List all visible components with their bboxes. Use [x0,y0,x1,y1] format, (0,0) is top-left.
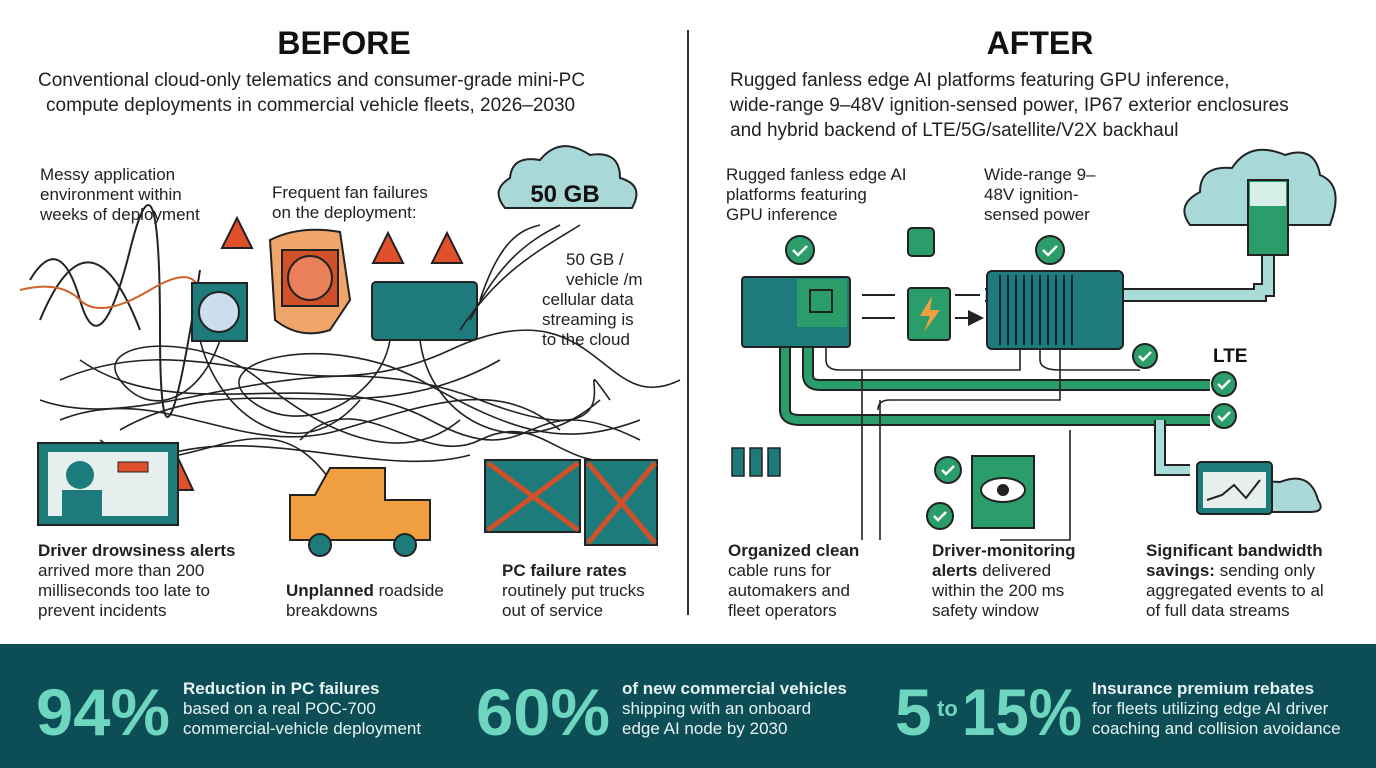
icon: battery and plug [862,228,980,340]
stat: 5 to 15%: Insurance premium rebates [1092,679,1314,698]
stat: 60%: 60% [476,675,610,749]
icon: connectors [732,448,780,476]
text: fan failures: Frequent fan failures [272,183,428,202]
icon: failed pcs [485,460,657,545]
icon: ruggedized computer [987,271,1123,349]
stat: 60%: shipping with an onboard [622,699,811,718]
text: pc failures: routinely put trucks [502,581,645,600]
text: fan failures: on the deployment: [272,203,417,222]
text: pc failures: out of service [502,601,603,620]
icon: cloud server [1184,150,1336,255]
subtitle: before: Conventional cloud-only telematics and consumer-grade mini-PC [38,70,585,91]
text: fan failures [272,183,428,222]
text: 50GB streaming: 50 GB / [566,250,624,269]
icon: cloud 50GB [499,146,636,208]
text: bandwidth: savings: sending only [1146,561,1316,580]
stat: 5 to 15% [895,675,1341,749]
text: driver monitoring: safety window [932,601,1039,620]
stat: 94%: based on a real POC-700 [183,699,376,718]
cables [785,220,1268,540]
text: 50GB streaming: streaming is [542,310,634,329]
stat: 5 to 15%: to [937,696,958,721]
text: driver drowsiness: prevent incidents [38,601,167,620]
icon: fan small [192,283,247,341]
text: bandwidth: Significant bandwidth [1146,541,1323,560]
icon: driver [38,443,178,525]
text: cable runs: fleet operators [728,601,837,620]
icons: warnings [163,218,462,490]
panel: before illustration [20,146,680,620]
text: rugged [726,165,907,224]
stat: 60%: edge AI node by 2030 [622,719,787,738]
title: before: BEFORE [277,25,411,61]
text: messy environment: environment within [40,185,182,204]
subtitle: after [729,70,1289,141]
text: rugged: Rugged fanless edge AI [726,165,907,184]
text: driver monitoring: within the 200 ms [931,581,1064,600]
text: driver drowsiness [38,541,235,620]
panel: stats banner [0,644,1376,768]
stat: 60% [476,675,847,749]
text: cable runs: cable runs for [728,561,831,580]
text: bandwidth [1146,541,1324,620]
text: 50GB streaming: cellular data [542,290,634,309]
text: messy environment [39,165,200,224]
subtitle: before: compute deployments in commercial vehicle fleets, 2026–2030 [46,95,575,116]
stat: 5 to 15%: 5 [895,675,932,749]
text: breakdowns: breakdowns [286,601,378,620]
icon: burning fan [270,230,350,333]
text: driver monitoring: Driver-monitoring [932,541,1076,560]
title: after: AFTER [987,25,1093,61]
icon: cloud 50GB: 50 GB [530,181,600,208]
chart: messy waves [30,205,200,417]
text: bandwidth: of full data streams [1146,601,1290,620]
panel: after illustration [726,150,1336,620]
text: wide range [984,165,1096,224]
text: breakdowns [286,581,444,620]
text: driver monitoring [931,541,1076,620]
stat: 94%: Reduction in PC failures [183,679,379,698]
icon: eye monitor [972,456,1034,528]
text: wide range: 48V ignition- [984,185,1079,204]
stat: 5 to 15%: 15% [962,675,1082,749]
subtitle: after: wide-range 9–48V ignition-sensed power, IP67 exterior enclosures [729,95,1289,116]
text: LTE: LTE [1213,346,1247,367]
stat: 60%: of new commercial vehicles [622,679,847,698]
text: 50GB streaming [542,250,643,349]
text: messy environment: weeks of deployment [39,205,200,224]
text: driver drowsiness: milliseconds too late to [38,581,210,600]
stat: 5 to 15%: for fleets utilizing edge AI driver [1092,699,1329,718]
icons: checks [786,236,1236,529]
divider [687,30,689,615]
text: 50GB streaming: to the cloud [542,330,630,349]
text: driver drowsiness: arrived more than 200 [38,561,204,580]
cables tangle [40,225,680,480]
text: wide range: Wide-range 9– [984,165,1096,184]
text: driver drowsiness: Driver drowsiness alerts [38,541,235,560]
text: breakdowns: Unplanned roadside [286,581,444,600]
text: wide range: sensed power [984,205,1090,224]
text: cable runs: Organized clean [728,541,859,560]
stat: 94%: 94% [36,675,170,749]
text: rugged: GPU inference [726,205,838,224]
subtitle: after: and hybrid backend of LTE/5G/satellite/V2X backhaul [730,120,1179,141]
icon: mini-pc [372,282,477,340]
stat: 94% [36,675,421,749]
text: 50GB streaming: vehicle /m [566,270,643,289]
text: driver monitoring: alerts delivered [932,561,1051,580]
stat: 94%: commercial-vehicle deployment [183,719,421,738]
text: cable runs [728,541,859,620]
subtitle: after: Rugged fanless edge AI platforms featuring GPU inference, [730,70,1230,91]
text: pc failures [502,561,645,620]
stat: 5 to 15%: coaching and collision avoidance [1092,719,1341,738]
icon: edge ai box [742,277,850,347]
icon: bandwidth dashboard [1197,462,1321,514]
subtitle: before [38,70,585,116]
text: pc failures: PC failure rates [502,561,627,580]
text: messy environment: Messy application [40,165,175,184]
text: rugged: platforms featuring [726,185,867,204]
icon: truck [290,468,430,556]
text: bandwidth: aggregated events to al [1146,581,1324,600]
text: cable runs: automakers and [728,581,850,600]
